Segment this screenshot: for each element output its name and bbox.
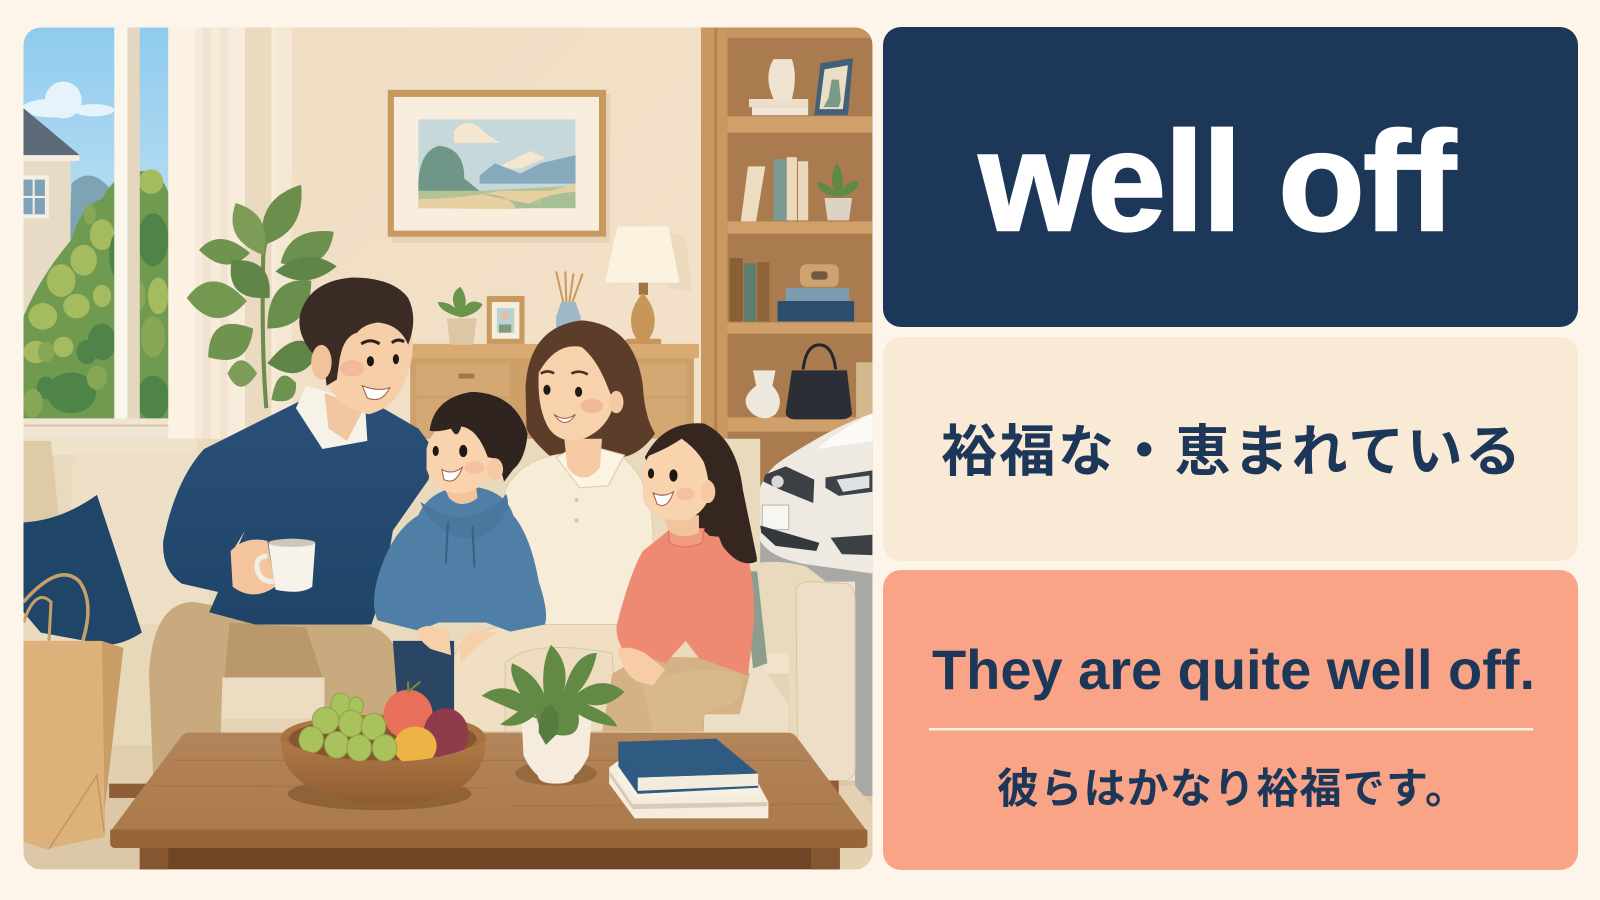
girl [602, 423, 757, 732]
panel: Japanese meaning [883, 337, 1578, 561]
white vase with plant [482, 645, 624, 786]
framed landscape picture [388, 90, 610, 243]
mother [454, 320, 655, 732]
sofa [23, 439, 855, 801]
panel: example sentence [883, 570, 1578, 870]
reed diffuser [556, 271, 583, 330]
boy [374, 392, 546, 714]
curtain [168, 28, 292, 439]
small plant and photo on sideboard [438, 287, 524, 345]
shopping bag [23, 575, 123, 849]
English example: They are quite well off. [932, 638, 1535, 701]
shelf items: vase and books [749, 58, 853, 115]
divider line [929, 728, 1533, 730]
meaning text: 裕福な・恵まれている [941, 420, 1521, 483]
panel: headword [883, 27, 1578, 327]
white car [755, 413, 872, 573]
shelf items: books and small plant [741, 157, 859, 221]
navy throw pillow [23, 495, 142, 645]
floor [23, 541, 872, 869]
Japanese translation: 彼らはかなり裕福です。 [997, 765, 1467, 812]
fruit bowl [281, 682, 486, 810]
coffee table [110, 733, 867, 869]
shelf unit [701, 28, 872, 579]
large potted plant [187, 185, 337, 408]
shelf items: white vase and black handbag [746, 345, 872, 419]
table lamp [605, 227, 692, 347]
window with garden view [22, 28, 171, 439]
headword text: well off [978, 102, 1457, 260]
panel: family illustration [22, 28, 872, 869]
coffee mug and hand [231, 539, 315, 594]
shelf items: books and box [730, 258, 854, 321]
stacked books [609, 739, 768, 818]
sideboard [410, 344, 699, 439]
father [149, 278, 434, 776]
